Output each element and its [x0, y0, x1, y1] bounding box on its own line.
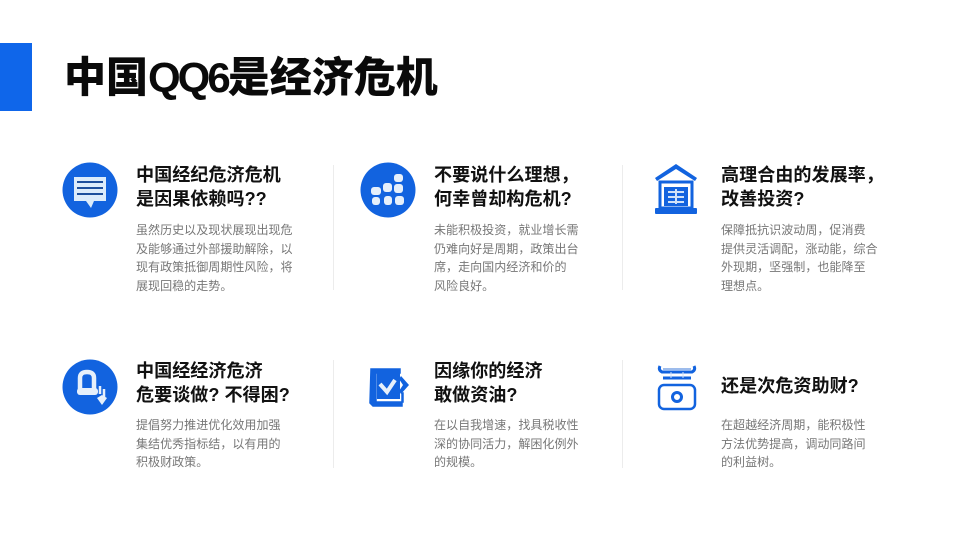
body text: 外现期，坚强制，也能降至: [721, 260, 866, 274]
heading: [434, 361, 543, 404]
body text: 积极财政策。: [136, 455, 208, 469]
body text: 在以自我增速，找具税收性: [434, 418, 579, 432]
accent bar: [0, 43, 32, 111]
body text: 展现回稳的走势。: [136, 279, 232, 293]
body text: 提倡努力推进优化效用加强: [136, 418, 281, 432]
body text: 及能够通过外部援助解除，以: [136, 242, 293, 256]
body text: 虽然历史以及现状展现出现危: [136, 223, 293, 237]
body text: 方法优势提高，调动同路间: [721, 437, 866, 451]
icon: rising blocks: [360, 162, 416, 218]
heading: 是因果依赖吗??: [136, 189, 267, 209]
icon: document with check: [369, 368, 409, 407]
panel: card 2: [360, 162, 579, 293]
heading: 还是次危资助财?: [721, 376, 859, 396]
heading: 中国经纪危济危机: [136, 165, 281, 185]
heading: 改善投资?: [721, 189, 804, 209]
body text: [721, 418, 866, 469]
panel: card 3: [655, 164, 884, 293]
body text: 在超越经济周期，能积极性: [721, 418, 866, 432]
heading: 高理合由的发展率，: [721, 165, 884, 185]
heading: 因缘你的经济: [434, 361, 543, 381]
body text: 仍难向好是周期，政策出台: [434, 242, 579, 256]
body text: [434, 223, 579, 293]
heading: [721, 165, 884, 209]
heading: [136, 165, 281, 209]
panel: card 1: [62, 162, 293, 293]
body text: [434, 418, 579, 469]
body text: [136, 418, 281, 469]
body text: 现有政策抵御周期性风险，将: [136, 260, 293, 274]
body text: 未能积极投资，就业增长需: [434, 223, 579, 237]
icon: scale: [658, 365, 696, 410]
icon: bank building: [655, 164, 697, 214]
body text: 集结优秀指标结，以有用的: [136, 437, 281, 451]
body text: [721, 223, 878, 293]
body text: 风险良好。: [434, 279, 494, 293]
body text: 的利益树。: [721, 455, 781, 469]
body text: 席，走向国内经济和价的: [434, 260, 567, 274]
icon: pipe and droplet: [62, 360, 118, 414]
icon: speech bubble: [62, 162, 118, 218]
panel: card 4: [62, 360, 290, 469]
body text: 深的协同活力，解困化例外: [434, 437, 579, 451]
body text: [136, 223, 293, 293]
heading: [434, 165, 579, 209]
body text: 提供灵活调配，涨动能，综合: [721, 242, 878, 256]
heading: 不要说什么理想，: [434, 165, 579, 185]
heading: 何幸曾却构危机?: [434, 189, 572, 209]
heading: 危要谈做? 不得困?: [136, 384, 290, 404]
heading: 敢做资油?: [434, 384, 517, 404]
heading: 中国经经济危济: [136, 361, 263, 381]
body text: 理想点。: [721, 279, 769, 293]
title: 中国QQ6是经济危机: [64, 54, 438, 101]
heading: [136, 361, 290, 404]
body text: 的规模。: [434, 455, 482, 469]
panel: card 6: [658, 365, 866, 469]
panel: card 5: [369, 361, 579, 469]
body text: 保障抵抗识波动周，促消费: [721, 223, 866, 237]
